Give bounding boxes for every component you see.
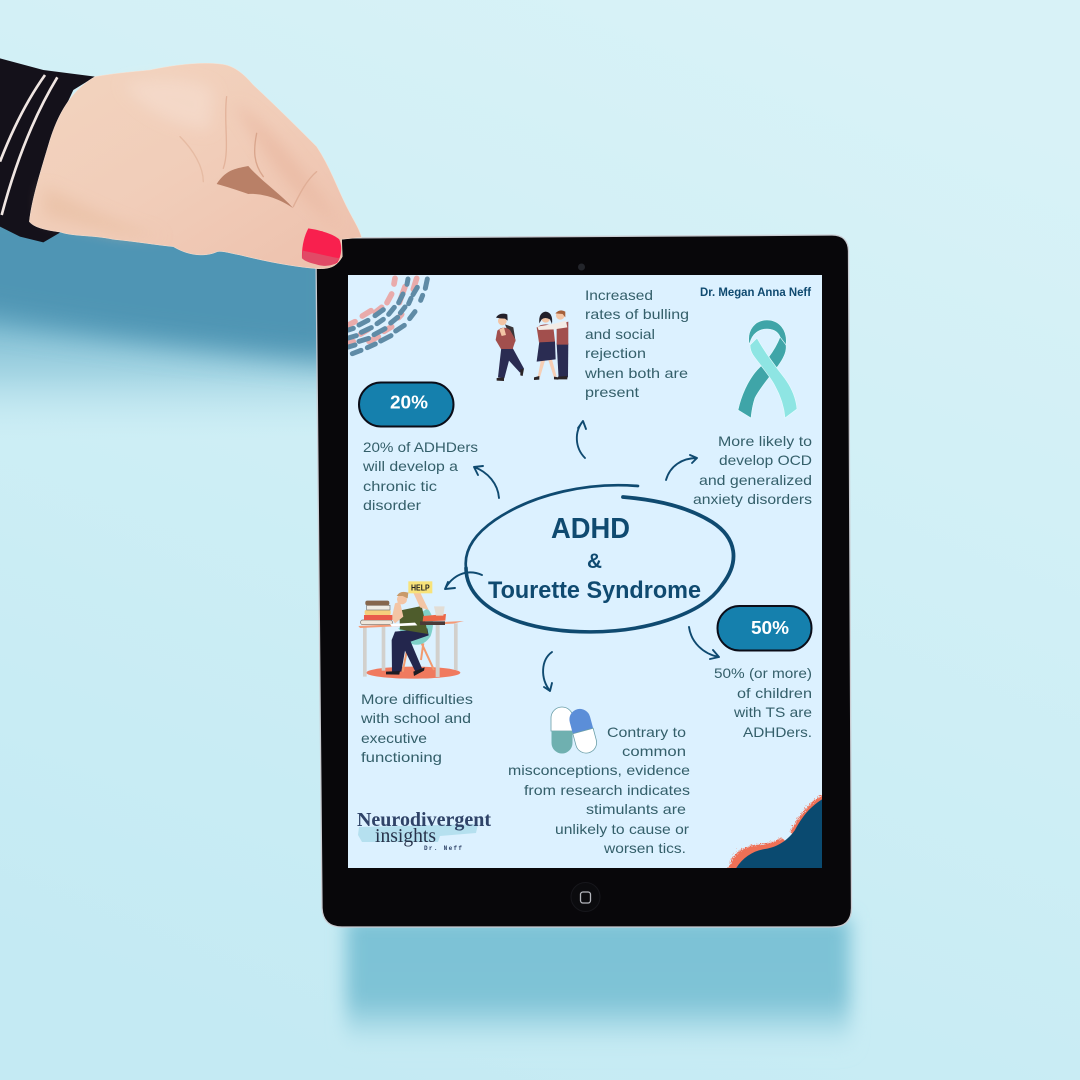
tablet [316,235,852,927]
corner blob [727,795,822,868]
paper [390,623,417,626]
text: stimulants: common [622,743,686,759]
finger gap [217,166,293,208]
arrow: to desk [445,572,482,589]
arrow: to capsules [543,652,552,691]
author name: Dr. Megan Anna Neff [700,287,811,299]
text: school: functioning [361,749,442,765]
text: 20%: disorder [363,497,421,513]
text: 20% [362,439,478,513]
screen [347,275,826,872]
title: ADHD [551,513,630,545]
text: stimulants: unlikely to cause or [555,821,689,837]
hand shadow [0,226,316,414]
title: Tourette Syndrome [488,577,701,604]
text: bullying: Increased [585,287,653,303]
text: school: More difficulties [361,691,473,707]
arrow: to 20% [474,466,499,498]
logo [357,810,492,852]
brush stroke [358,824,478,842]
badge: 20% [359,382,454,426]
text: stimulants: from research indicates [524,782,690,798]
chair [398,608,434,672]
icon: student at desk [358,581,464,679]
arrow: to OCD [666,455,697,480]
desk [358,621,464,677]
text: OCD: and generalized [699,472,812,488]
floor [366,667,460,679]
home button [571,882,600,912]
badge: 50% [718,606,812,650]
text: stimulants: worsen tics. [603,840,686,856]
text: bullying: present [585,384,639,400]
girl [534,312,558,380]
mug [434,606,445,616]
hand [0,58,362,269]
text: OCD: anxiety disorders [693,491,812,507]
text: bullying: when both are [584,365,688,381]
sleeve [0,58,95,242]
text: 50%: of children [737,685,812,701]
left capsule [551,707,573,754]
text: 50% [714,665,812,740]
text: OCD [693,433,812,507]
text: stimulants: stimulants are [586,801,686,817]
text: 20%: chronic tic [363,478,437,494]
icon: awareness ribbon [738,320,797,418]
text: 50%: ADHDers. [743,724,812,740]
text: school [360,691,473,765]
badge: 20%: 20% [390,392,428,412]
tablet shadow [346,918,850,1053]
logo: insights [375,825,436,847]
nail [302,228,341,266]
walking boy [496,314,524,381]
right capsule [567,707,599,755]
logo: Neurodivergent [357,810,492,831]
text: stimulants: misconceptions, evidence [508,762,690,778]
text: 50%: 50% (or more) [714,665,812,681]
text: bullying [584,287,689,400]
text: school: with school and [360,710,471,726]
book stack [361,601,392,625]
student [386,591,429,676]
icon: bullying students [496,310,568,381]
small books [420,614,446,625]
text: 50%: with TS are [733,704,812,720]
text: school: executive [361,730,427,746]
text: 20%: will develop a [362,458,458,474]
text: bullying: rates of bulling [585,306,689,322]
camera [578,264,585,270]
whispering boy [537,310,568,379]
palm and fingers [29,63,362,269]
text: stimulants: Contrary to [607,724,686,740]
central ellipse [466,485,733,632]
title: & [587,550,602,573]
hand shading [43,79,340,237]
help sign: HELP [411,583,430,592]
text: OCD: More likely to [718,433,812,449]
decorative dashes [347,278,427,354]
tablet body [316,235,852,927]
arrow: to bullying [577,421,586,458]
finger creases [180,97,317,207]
text: stimulants [508,724,690,856]
badge: 50%: 50% [751,618,789,638]
text: OCD: develop OCD [719,452,812,468]
title [488,513,701,604]
text: bullying: rejection [585,345,646,361]
logo: Dr. Neff [424,845,462,852]
text: bullying: and social [585,326,655,342]
arrow: to 50% [689,627,719,659]
screen background [348,275,822,868]
icon: capsules [551,707,599,755]
text: 20%: 20% of ADHDers [363,439,478,455]
